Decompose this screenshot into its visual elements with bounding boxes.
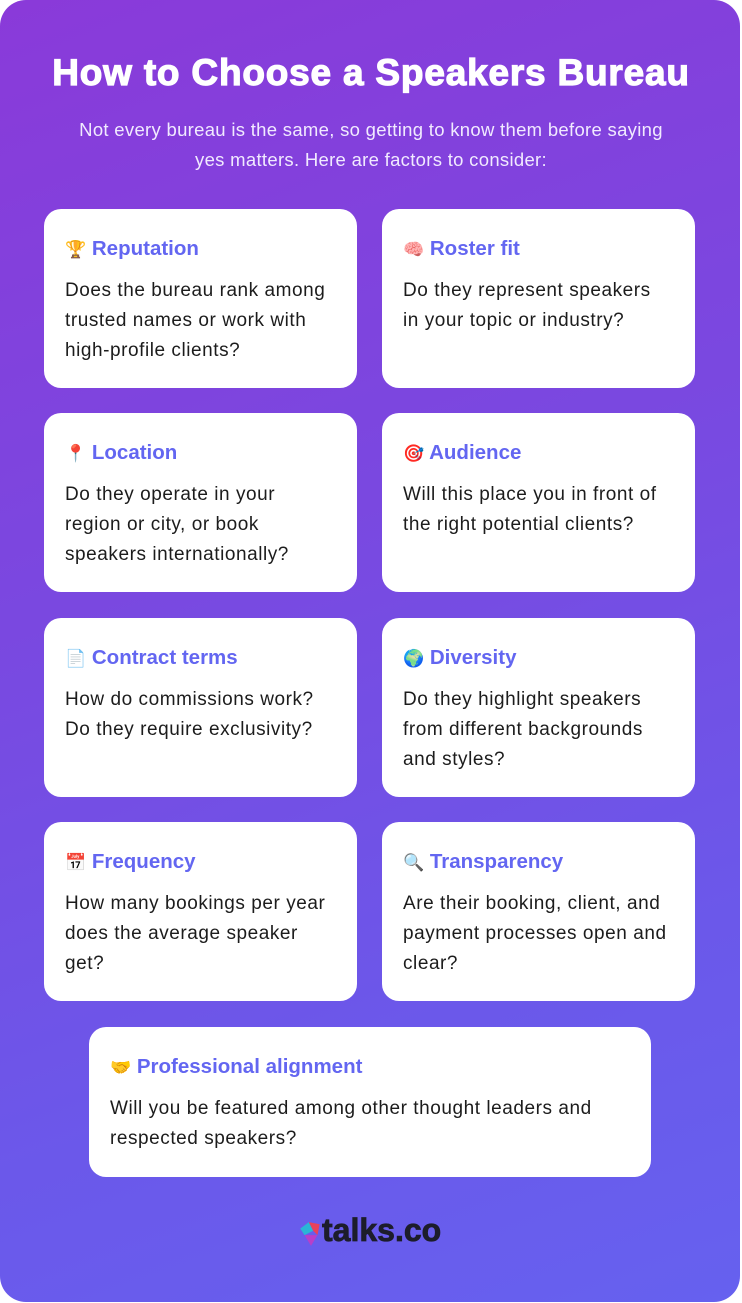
card: professional alignment: 🤝 Professional alignment (110, 1055, 362, 1078)
card: roster fit: Do they represent speakers in your topic or industry? (403, 280, 651, 331)
card: transparency (382, 822, 695, 1001)
card: location: 📍 Location (65, 441, 177, 464)
card: reputation (44, 209, 357, 388)
card: audience (382, 413, 695, 592)
card: audience: 🎯 Audience (403, 441, 521, 464)
card: professional alignment (89, 1027, 651, 1177)
card: contract terms: 📄 Contract terms (65, 646, 238, 669)
card: contract terms (44, 618, 357, 797)
card: diversity: 🌍 Diversity (403, 646, 516, 669)
card: contract terms: How do commissions work? Do they require exclusivity? (65, 689, 314, 740)
card: location: Do they operate in your region or city, or book speakers internationally? (65, 484, 289, 565)
card: frequency: How many bookings per year does the average speaker get? (65, 893, 325, 974)
title: How to Choose a Speakers Bureau (52, 52, 690, 93)
card: roster fit: 🧠 Roster fit (403, 237, 520, 260)
card: diversity: Do they highlight speakers from different backgrounds and styles? (403, 689, 643, 770)
card: reputation: 🏆 Reputation (65, 237, 199, 260)
card: professional alignment: Will you be featured among other thought leaders and respected speakers? (110, 1098, 592, 1149)
subtitle: Not every bureau is the same, so getting to know them before saying yes matters. Here are factors to consider: (79, 119, 663, 170)
card: audience: Will this place you in front of the right potential clients? (403, 484, 657, 535)
card: frequency: 📅 Frequency (65, 850, 196, 873)
card: reputation: Does the bureau rank among trusted names or work with high-profile clients? (65, 280, 325, 361)
card: roster fit (382, 209, 695, 388)
card: location (44, 413, 357, 592)
card: frequency (44, 822, 357, 1001)
logo: talks.co (322, 1212, 441, 1248)
card: transparency: Are their booking, client, and payment processes open and clear? (403, 893, 667, 974)
card: diversity (382, 618, 695, 797)
card: transparency: 🔍 Transparency (403, 850, 563, 873)
